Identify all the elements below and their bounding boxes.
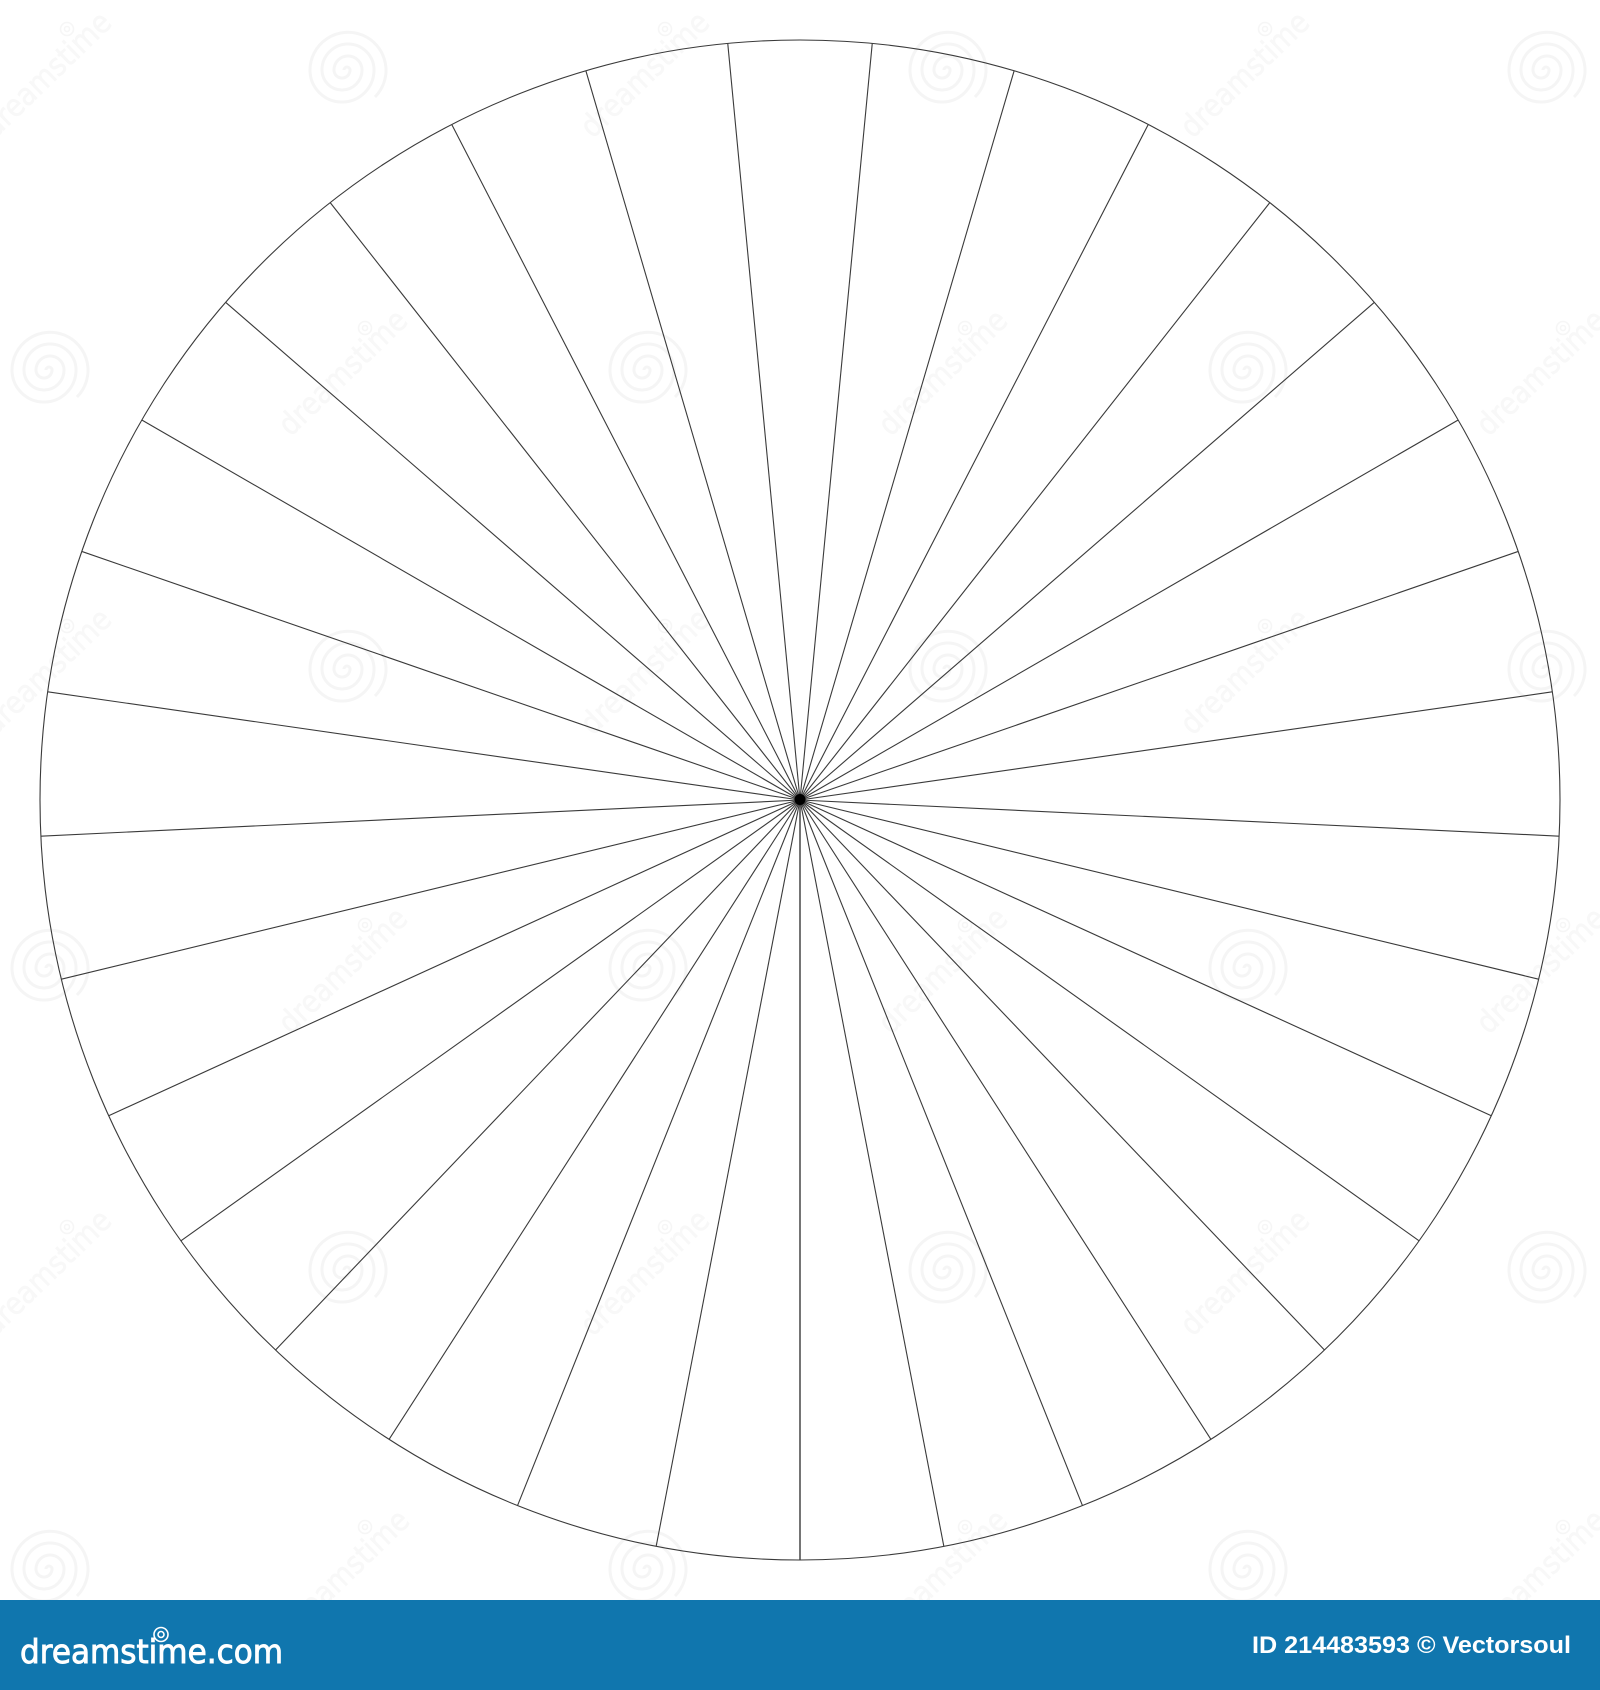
watermark text: dreamstime: [1173, 602, 1317, 742]
watermark text: dreamstime: [573, 1203, 717, 1343]
watermark text: dreamstime: [273, 1503, 417, 1643]
watermark text: dreamstime: [271, 901, 415, 1041]
image credit: ID 214483593 © Vectorsoul: [1252, 1632, 1571, 1659]
watermark text: dreamstime: [1173, 1203, 1317, 1343]
centre hub: [794, 794, 806, 805]
icon: logo spiral: [154, 1628, 168, 1642]
watermark text: dreamstime: [871, 901, 1015, 1041]
watermark text: dreamstime: [871, 1503, 1015, 1643]
footer bar: [0, 1600, 1600, 1690]
watermark text: dreamstime: [871, 303, 1015, 443]
watermark text: dreamstime: [573, 602, 717, 742]
watermark text: dreamstime: [271, 303, 415, 443]
logo text: dreamstime.com: [20, 1632, 283, 1671]
